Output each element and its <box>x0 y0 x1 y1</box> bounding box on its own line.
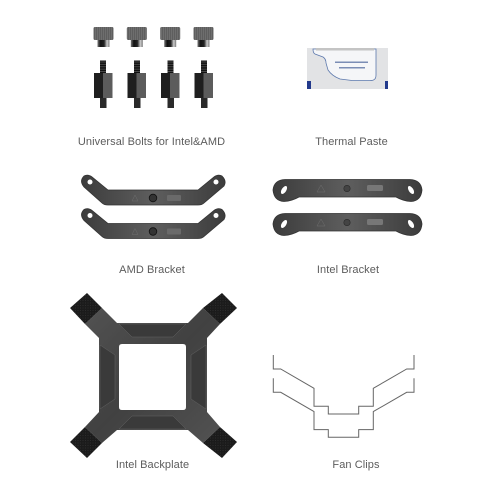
label: fan clips: Fan Clips <box>332 459 380 471</box>
standoff bolts row <box>94 60 213 108</box>
fan clip top <box>273 355 414 414</box>
corner pad bottom left <box>70 427 102 458</box>
label: AMD bracket: AMD Bracket <box>119 264 185 276</box>
label: thermal paste: Thermal Paste <box>315 136 388 148</box>
Intel bracket top <box>273 180 422 202</box>
corner pad top right <box>203 293 237 324</box>
embossed ridges <box>100 324 206 429</box>
AMD bracket bottom <box>82 209 225 238</box>
AMD bracket top <box>82 175 225 205</box>
backplate cross body <box>85 308 220 443</box>
corner pad top left <box>70 293 102 324</box>
label: Intel backplate: Intel Backplate <box>116 459 189 471</box>
group: AMD brackets <box>82 175 225 238</box>
corner pad bottom right <box>203 427 237 458</box>
Intel bracket bottom <box>273 214 422 236</box>
label: universal bolts: Universal Bolts for Intel&AMD <box>78 136 225 148</box>
group: universal bolts <box>94 27 214 108</box>
label: Intel bracket: Intel Bracket <box>317 264 379 276</box>
fan clip bottom <box>273 378 414 437</box>
icon: fan clips <box>273 355 414 437</box>
thumb screw caps row <box>94 27 214 47</box>
group: Intel brackets <box>273 180 422 236</box>
icon: thermal paste sachet <box>307 48 388 89</box>
icon: Intel backplate <box>70 293 237 458</box>
